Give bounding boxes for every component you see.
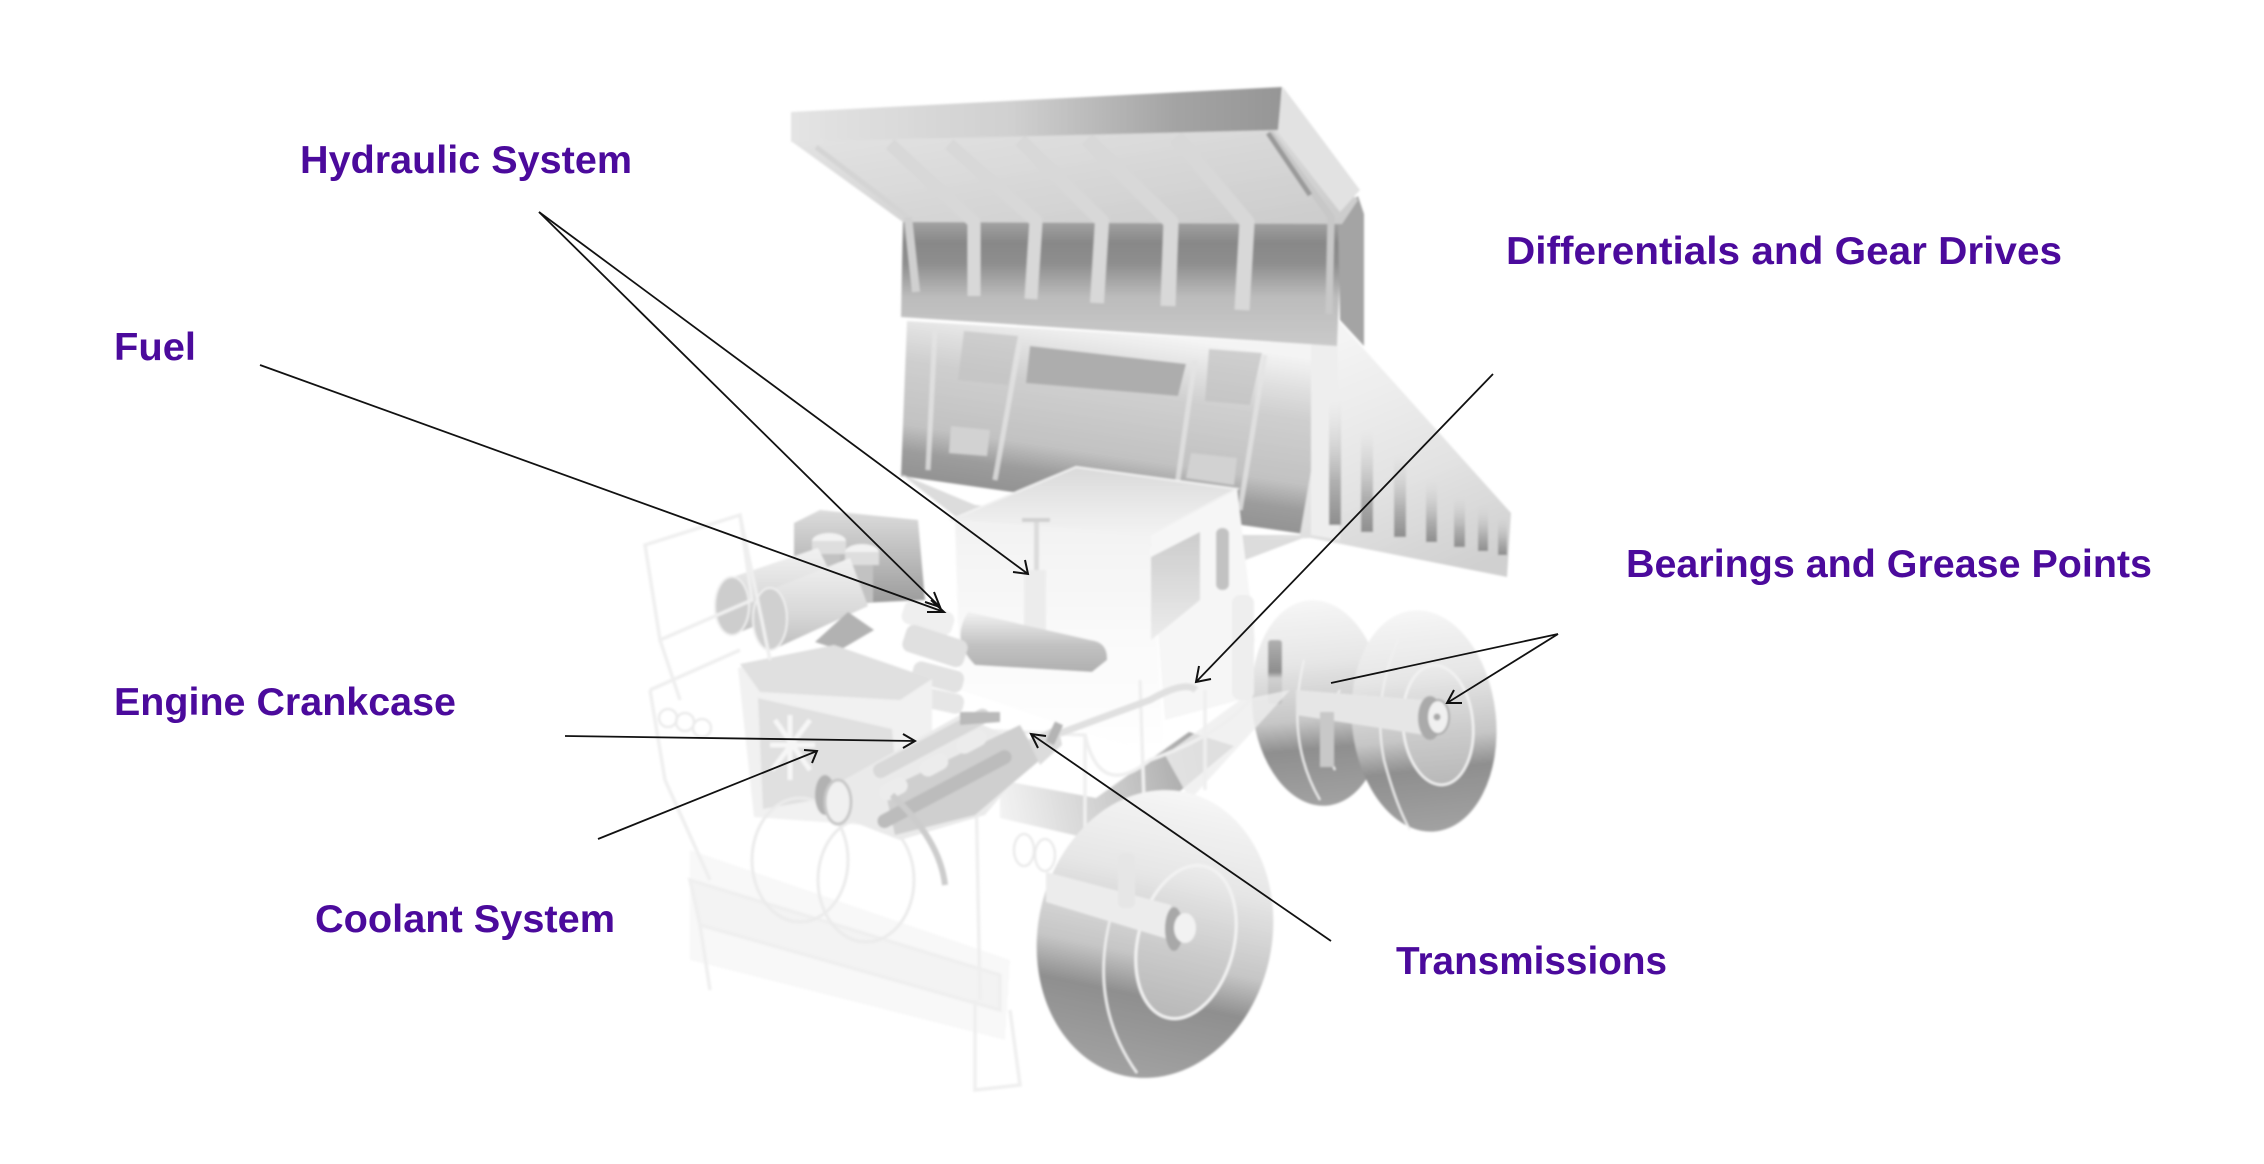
label: Fuel: Fuel xyxy=(114,326,196,369)
small cylinders xyxy=(900,599,970,715)
arrow: coolant system xyxy=(598,750,817,839)
arrow: differentials and gear drives xyxy=(1196,374,1493,682)
canopy lip xyxy=(1276,87,1360,212)
canopy front edge xyxy=(791,87,1282,142)
inner rear tire xyxy=(1243,595,1393,811)
arrow: hydraulic system to left filter xyxy=(539,212,940,607)
canopy underside xyxy=(791,128,1358,224)
front axle xyxy=(1046,872,1171,940)
cab xyxy=(950,467,1255,760)
rear wheels xyxy=(1243,595,1507,839)
strut on rear wheel xyxy=(1268,640,1282,704)
arrow: fuel xyxy=(260,365,944,612)
dump bed dark side strip xyxy=(1338,196,1364,346)
label: Coolant System: Coolant System xyxy=(315,898,615,941)
canopy ribs xyxy=(816,133,1331,314)
radiator hood xyxy=(738,645,932,830)
air cylinders xyxy=(715,548,874,650)
label: Bearings and Grease Points: Bearings and Grease Points xyxy=(1626,543,2152,586)
arrow: engine crankcase xyxy=(565,734,915,748)
arrow: bearings to inner wheel xyxy=(1331,634,1558,683)
engine xyxy=(815,706,1062,885)
lamp clusters xyxy=(659,709,1055,871)
cab right post xyxy=(1232,595,1254,700)
very faint chassis fill xyxy=(690,850,1010,1040)
dump bed side xyxy=(1245,319,1511,577)
driveshaft xyxy=(1046,687,1196,745)
illustration: dump truck xyxy=(645,87,1511,1100)
frame beam xyxy=(1000,732,1234,846)
railings xyxy=(645,515,1250,1090)
dump bed lower front panel xyxy=(901,321,1337,560)
dump bed upper back panel xyxy=(901,217,1342,346)
label: Hydraulic System: Hydraulic System xyxy=(300,139,632,182)
outer rear tire xyxy=(1341,603,1507,839)
filter caps xyxy=(812,533,879,602)
rear axle xyxy=(1296,690,1425,735)
panel under cab side xyxy=(1165,690,1290,800)
fuel tank xyxy=(960,612,1107,672)
hydraulic filler pipe xyxy=(1034,522,1039,582)
arrow: hydraulic system to filler xyxy=(539,212,1028,574)
arrows xyxy=(260,212,1558,941)
arrow: transmissions xyxy=(1031,734,1331,941)
hydraulic tank mount plate xyxy=(794,510,925,606)
arrow: bearings to outer hub xyxy=(1447,634,1558,703)
label: Differentials and Gear Drives: Differentials and Gear Drives xyxy=(1506,230,2062,273)
fan circles on chassis xyxy=(752,798,914,942)
front wheel xyxy=(1010,768,1300,1100)
label: Engine Crankcase: Engine Crankcase xyxy=(114,681,456,724)
label: Transmissions: Transmissions xyxy=(1396,940,1667,983)
